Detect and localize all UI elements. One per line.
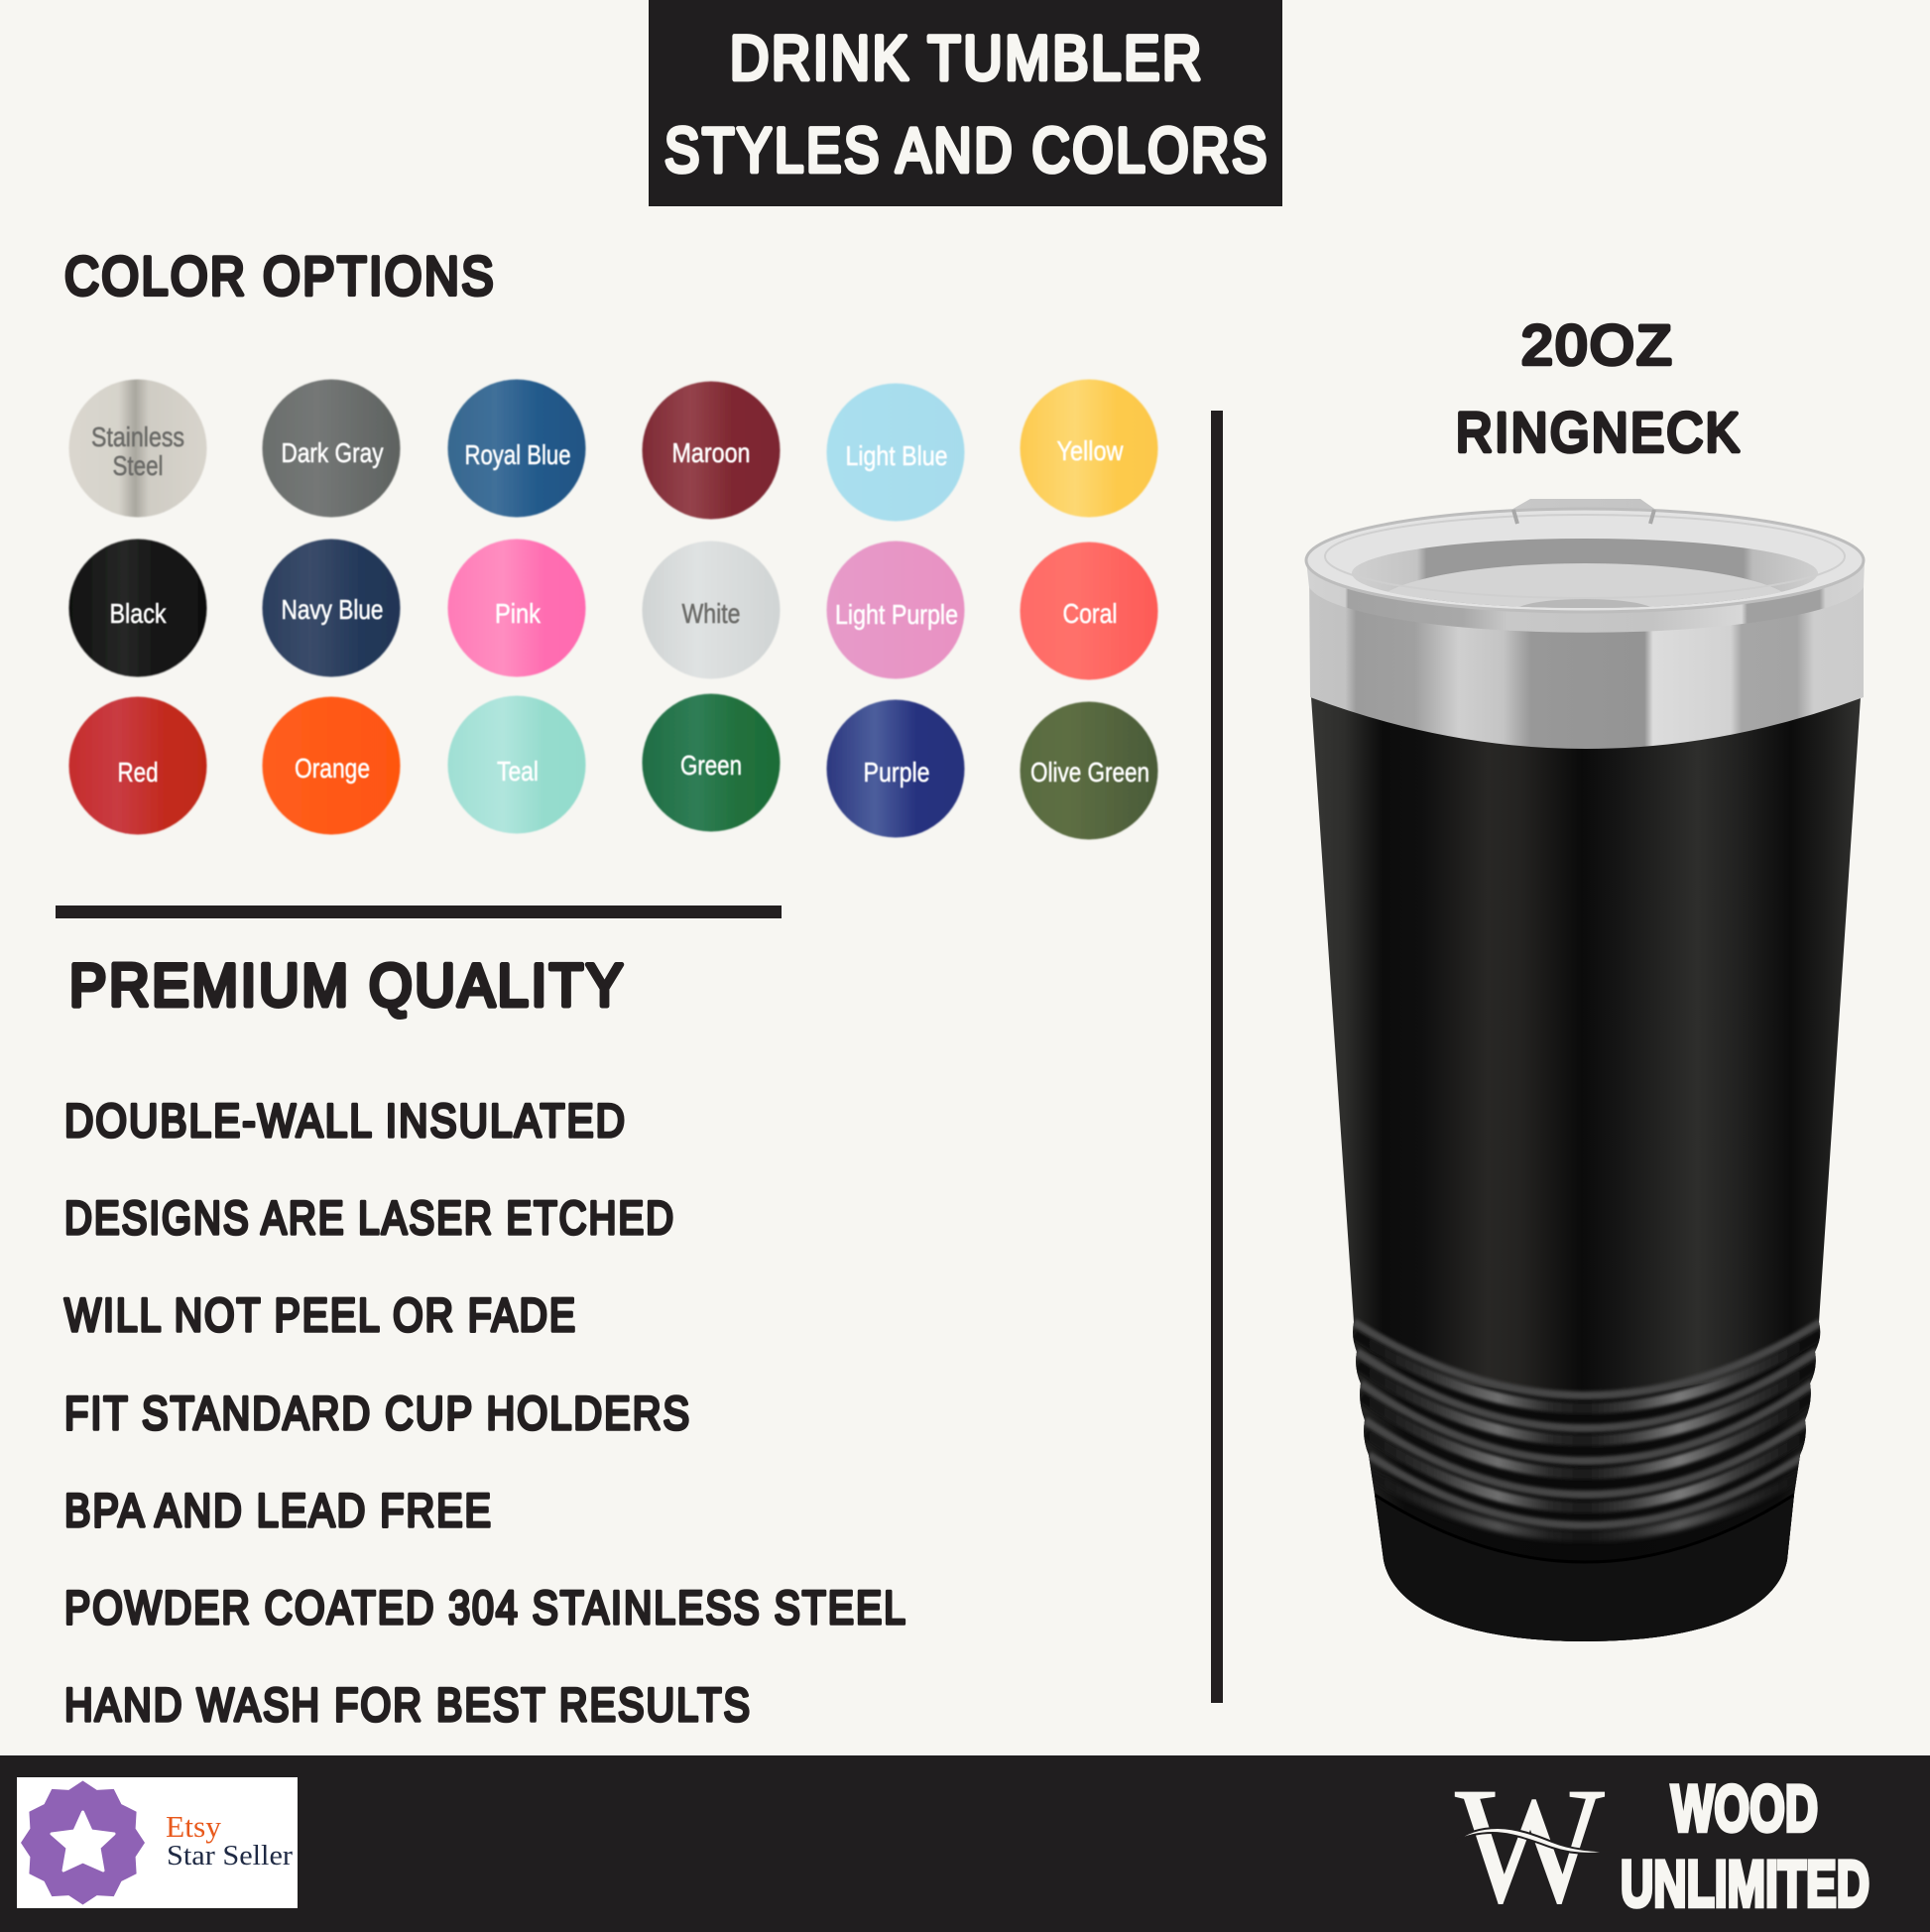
wordmark: wood unlimited — [1621, 1771, 1870, 1920]
tumbler label: RINGNECK — [1456, 401, 1742, 463]
title banner: DRINK TUMBLER — [730, 24, 1204, 93]
swatch: light blue — [827, 383, 964, 522]
icon: purple badge with star — [21, 1781, 145, 1904]
swatch: stainless steel: Stainless — [91, 422, 184, 452]
swatch: dark gray — [262, 379, 401, 518]
footer bar — [0, 1753, 1930, 1932]
star seller label: Star Seller — [167, 1840, 293, 1872]
swatch: royal blue: Royal Blue — [464, 439, 571, 470]
swatch: yellow: Yellow — [1057, 435, 1124, 466]
etsy label: Etsy — [166, 1809, 221, 1844]
swatch: maroon — [643, 381, 780, 520]
swatch: olive green — [1020, 702, 1158, 839]
swatch: coral: Coral — [1063, 598, 1117, 629]
etsy star seller badge — [17, 1777, 298, 1908]
feature list: HAND WASH FOR BEST RESULTS — [64, 1678, 752, 1731]
feature list: BPA AND LEAD FREE — [64, 1484, 493, 1536]
color swatches grid — [69, 379, 1158, 839]
swatch: purple: Purple — [863, 757, 930, 787]
clear lid — [1305, 499, 1865, 633]
swatch: maroon: Maroon — [672, 437, 750, 468]
swatch: white — [643, 542, 780, 678]
tumbler body — [1311, 697, 1861, 1641]
feature list: POWDER COATED 304 STAINLESS STEEL — [64, 1581, 907, 1633]
swatch: purple — [827, 700, 964, 837]
swatch: green: Green — [680, 750, 742, 781]
swatch: black — [69, 540, 206, 676]
swatch: orange: Orange — [295, 753, 370, 784]
swatch: light blue: Light Blue — [845, 440, 948, 471]
swatch: dark gray: Dark Gray — [282, 437, 383, 468]
swatch: coral — [1020, 542, 1158, 680]
wood unlimited logo — [1455, 1753, 1870, 1932]
tumbler label: 20OZ — [1521, 313, 1674, 376]
swatch: orange — [262, 696, 401, 835]
swatch: navy blue — [262, 540, 401, 676]
swatch: black: Black — [109, 598, 167, 629]
grip ribs — [1354, 1322, 1821, 1536]
feature list: DOUBLE-WALL INSULATED — [64, 1094, 627, 1147]
swatch: pink: Pink — [495, 598, 542, 629]
swatch: red — [69, 696, 206, 835]
steel band — [1309, 565, 1864, 749]
wordmark: wood unlimited: WOOD — [1671, 1771, 1818, 1845]
feature list: FIT STANDARD CUP HOLDERS — [64, 1387, 691, 1439]
tumbler illustration — [1299, 499, 1874, 1666]
swatch: light purple: Light Purple — [835, 599, 958, 630]
swatch: pink — [448, 540, 585, 676]
feature list: WILL NOT PEEL OR FADE — [64, 1288, 577, 1341]
swatch: light purple — [827, 542, 964, 678]
title banner — [649, 0, 1282, 206]
swatch: olive green: Olive Green — [1030, 757, 1149, 787]
swatch: stainless steel: Steel — [113, 450, 163, 481]
swatch: red: Red — [117, 757, 159, 787]
swatch: teal: Teal — [497, 756, 539, 786]
tumbler base — [1375, 1496, 1794, 1641]
feature list — [64, 1094, 907, 1731]
heading: premium quality: PREMIUM QUALITY — [69, 952, 626, 1019]
swatch: teal — [448, 696, 585, 833]
swatch: white: White — [682, 598, 740, 629]
feature list: DESIGNS ARE LASER ETCHED — [64, 1191, 675, 1244]
swatch: navy blue: Navy Blue — [282, 594, 383, 625]
swatch: royal blue — [448, 379, 585, 518]
tumbler label — [1456, 313, 1742, 463]
swatch: green — [643, 694, 780, 831]
swatch: yellow — [1020, 379, 1158, 518]
swatch: stainless steel — [69, 379, 206, 518]
title banner: STYLES AND COLORS — [664, 116, 1269, 185]
heading: color options: COLOR OPTIONS — [64, 245, 496, 306]
